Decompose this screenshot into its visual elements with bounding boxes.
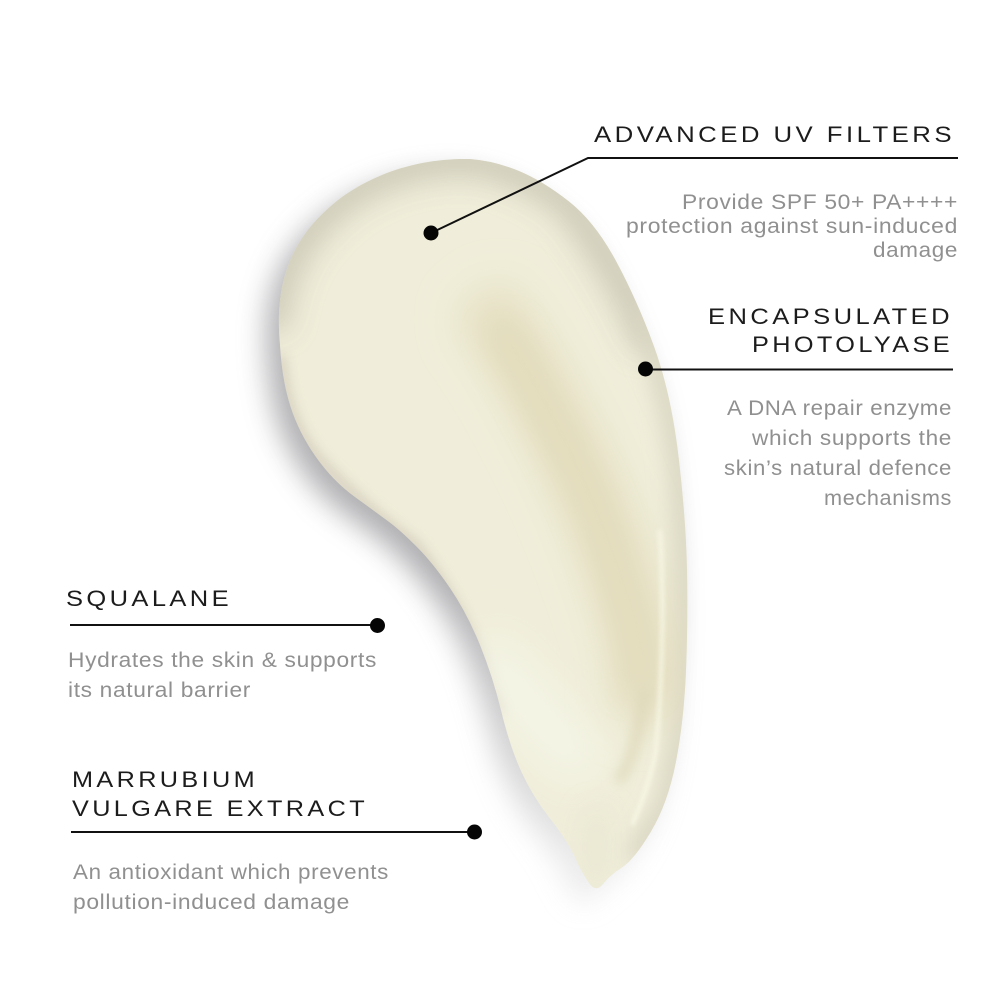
heading [708, 304, 953, 357]
description [626, 191, 958, 262]
cream body [278, 159, 688, 888]
description: pollution-induced damage [73, 891, 350, 914]
description: A DNA repair enzyme [727, 397, 952, 420]
description: mechanisms [824, 487, 952, 510]
heading: SQUALANE [66, 586, 232, 611]
description: Provide SPF 50+ PA++++ [682, 191, 958, 214]
heading: ENCAPSULATED [708, 304, 953, 329]
description [73, 861, 389, 914]
callout: advanced UV filters [424, 122, 958, 262]
heading: VULGARE EXTRACT [72, 796, 368, 821]
heading: ADVANCED UV FILTERS [594, 122, 955, 147]
heading: PHOTOLYASE [752, 332, 953, 357]
leader line [645, 368, 953, 370]
leader line [70, 624, 378, 626]
description: An antioxidant which prevents [73, 861, 389, 884]
description: skin’s natural defence [724, 457, 952, 480]
description: damage [873, 239, 958, 262]
description: which supports the [751, 427, 952, 450]
cream swatch [260, 140, 710, 910]
callout: marrubium vulgare extract [71, 767, 482, 914]
callout: encapsulated photolyase [638, 304, 953, 510]
description [724, 397, 952, 510]
leader line [71, 831, 474, 833]
description: its natural barrier [68, 679, 251, 702]
marker dot [467, 824, 482, 840]
heading: MARRUBIUM [72, 767, 258, 792]
marker dot [638, 362, 653, 376]
description: protection against sun-induced [626, 215, 958, 238]
callout: squalane [66, 586, 385, 702]
heading [72, 767, 368, 821]
marker dot [370, 618, 385, 633]
marker dot [424, 226, 438, 240]
leader line [431, 158, 958, 233]
description [68, 649, 377, 702]
cream cast shadow [266, 174, 674, 903]
description: Hydrates the skin & supports [68, 649, 377, 672]
